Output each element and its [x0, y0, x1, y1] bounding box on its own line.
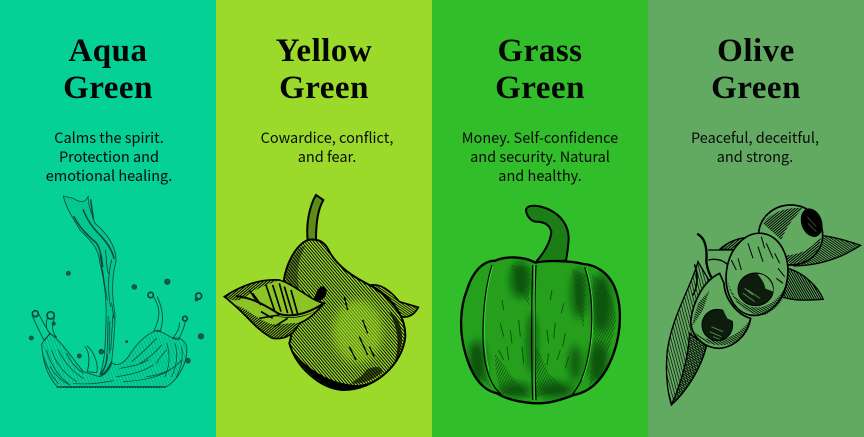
- panel: olive green: [648, 0, 864, 437]
- heading: grass green: Green: [495, 70, 585, 106]
- panel: grass green: [432, 0, 648, 437]
- olive stem: [693, 234, 738, 295]
- heading: yellow green: Green: [279, 70, 369, 106]
- water droplets: [29, 271, 204, 363]
- pear body: [284, 239, 405, 390]
- pear left leaf: [224, 280, 324, 339]
- text: aqua green meaning: Protection and: [59, 146, 159, 167]
- splash crown: [33, 297, 187, 387]
- heading: yellow green: Yellow: [276, 33, 372, 69]
- text: grass green meaning: [462, 127, 618, 186]
- heading: aqua green: Green: [63, 70, 153, 106]
- olive leaves: [666, 235, 861, 405]
- illustration: olives: [666, 205, 861, 405]
- olive top: [759, 205, 826, 265]
- text: olive green meaning: [691, 127, 819, 167]
- heading: olive green: Green: [711, 70, 801, 106]
- pepper shading: [468, 262, 612, 398]
- heading: aqua green: Aqua: [68, 33, 148, 69]
- text: grass green meaning: and healthy.: [498, 165, 582, 186]
- heading: olive green: [711, 33, 801, 106]
- heading: grass green: [495, 33, 585, 106]
- text: grass green meaning: Money. Self-confidence: [462, 127, 618, 148]
- text: yellow green meaning: and fear.: [298, 146, 356, 167]
- illustration: water splash: [29, 196, 204, 387]
- text: olive green meaning: Peaceful, deceitful,: [691, 127, 819, 148]
- illustration: bell pepper: [461, 206, 620, 403]
- panel: yellow green: [216, 0, 432, 437]
- heading: olive green: Olive: [717, 33, 795, 69]
- text: yellow green meaning: [261, 127, 393, 167]
- pepper stem: [526, 206, 569, 263]
- text: grass green meaning: and security. Natural: [470, 146, 610, 167]
- heading: grass green: Grass: [498, 33, 582, 69]
- text: yellow green meaning: Cowardice, conflict,: [261, 127, 393, 148]
- panel: aqua green: [0, 0, 216, 437]
- pepper body: [461, 257, 620, 403]
- heading: aqua green: [63, 33, 153, 106]
- text: aqua green meaning: emotional healing.: [46, 165, 172, 186]
- pear right leaf: [371, 285, 418, 317]
- heading: yellow green: [276, 33, 372, 106]
- water stream: [63, 196, 116, 376]
- olive middle: [721, 229, 793, 320]
- text: aqua green meaning: Calms the spirit.: [54, 127, 164, 148]
- text: aqua green meaning: [46, 127, 172, 186]
- olive bottom: [691, 273, 751, 348]
- text: olive green meaning: and strong.: [717, 146, 793, 167]
- pear stem: [307, 195, 323, 241]
- illustration: pear: [224, 195, 418, 390]
